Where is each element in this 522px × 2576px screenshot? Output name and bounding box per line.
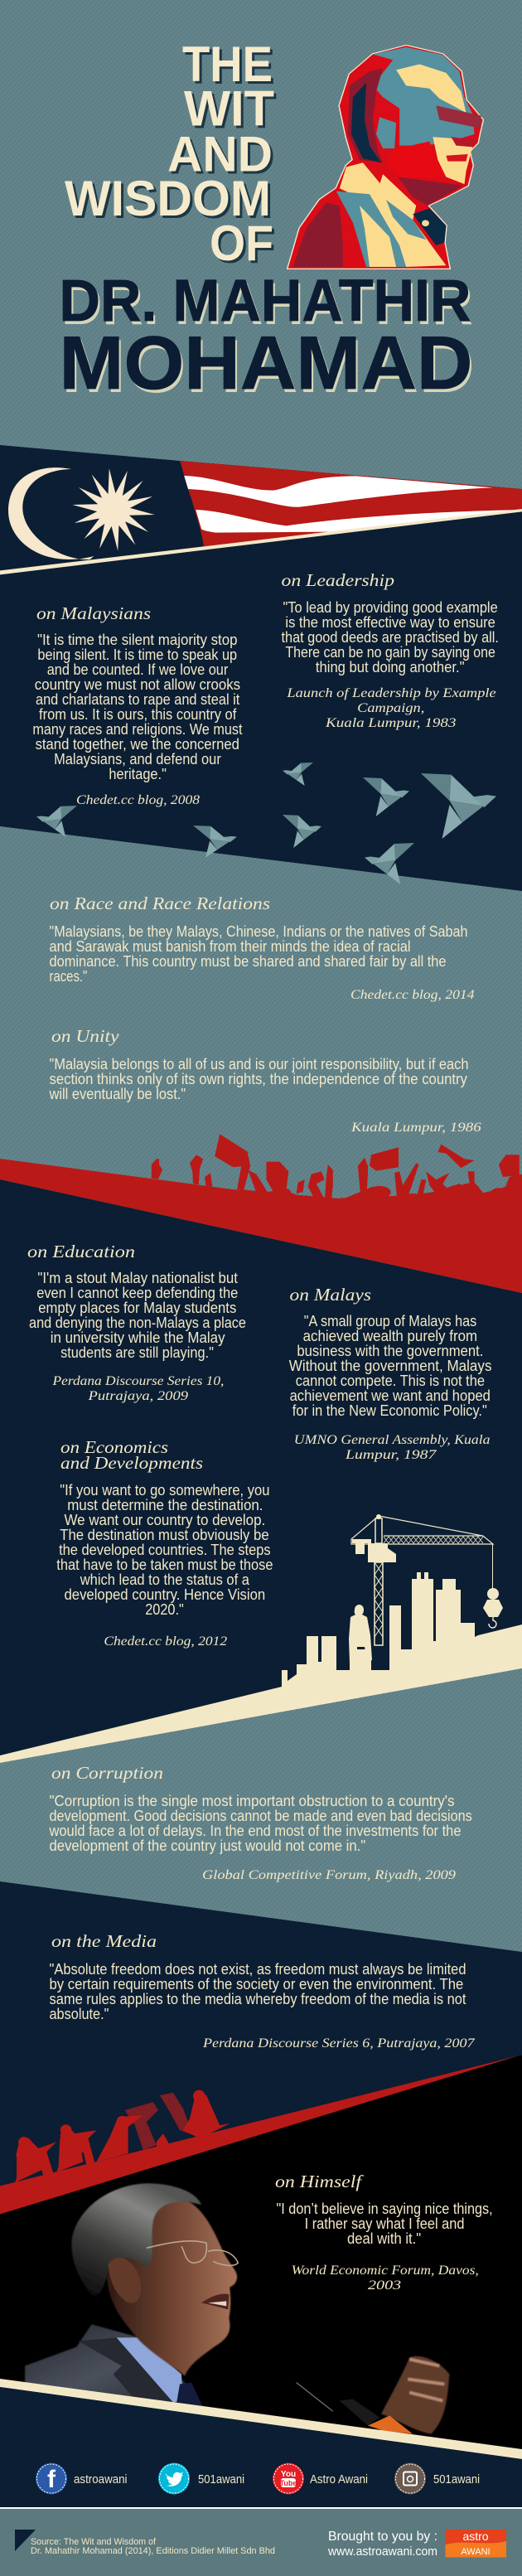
quote: on Economics and Developments: and Developments <box>60 1453 203 1473</box>
hair <box>71 2183 201 2296</box>
instagram: 501awani <box>433 2473 480 2486</box>
quote: on Malaysians: from us. It is ours, this country of <box>39 706 237 723</box>
navy band: the Media <box>0 1881 522 2509</box>
youtube: Astro Awani <box>310 2473 368 2486</box>
quote: on Malays: on Malays <box>290 1285 371 1305</box>
quote: on Leadership: Launch of Leadership by Example <box>286 686 496 700</box>
quote: on Race and Race Relations: Chedet.cc blog, 2014 <box>350 988 474 1002</box>
quote: on Malaysians: many races and religions. We must <box>32 721 243 738</box>
youtube <box>273 2463 368 2495</box>
quote: on Education: and denying the non-Malays a place <box>29 1315 246 1331</box>
facebook: f <box>47 2466 56 2493</box>
quote: on Malays: UMNO General Assembly, Kuala <box>294 1433 491 1447</box>
bird 4 <box>283 815 321 848</box>
Malaysian flag <box>0 461 522 574</box>
quote: on Education: empty places for Malay students <box>38 1300 236 1316</box>
quote: on Economics and Developments: 2020." <box>145 1601 184 1618</box>
quote: on Malaysians: on Malaysians <box>36 603 151 623</box>
quote: on Education: "I'm a stout Malay nationalist but <box>37 1270 238 1286</box>
quote: on Leadership: "To lead by providing good example <box>283 599 498 616</box>
navy band: Malaysians and Leadership <box>0 445 522 891</box>
quote: on Malaysians: country we must not allow crooks <box>35 676 240 693</box>
quote: on Himself: "I don’t believe in saying nice things, <box>277 2201 493 2217</box>
title block <box>60 36 475 409</box>
black panel: on Himself <box>0 2055 522 2452</box>
quote: on Leadership <box>282 570 499 730</box>
quote: on Himself: on Himself <box>275 2172 365 2191</box>
quote: on Malays <box>289 1285 492 1462</box>
twitter <box>158 2463 244 2495</box>
title: Dr. Mahathir Mohamad <box>60 269 475 409</box>
title: The Wit and Wisdom of: OF <box>212 218 276 274</box>
hand <box>381 2356 449 2434</box>
flag stripes <box>0 461 522 574</box>
quote: on Malays: "A small group of Malays has <box>304 1313 476 1329</box>
social media row <box>36 2463 480 2495</box>
quote: on Education: in university while the Malay <box>51 1329 225 1346</box>
quote: on Economics and Developments: We want our country to develop. <box>65 1512 265 1528</box>
quote: on Race and Race Relations: on Race and Race Relations <box>50 893 270 913</box>
quote: on Economics and Developments: the developed countries. The steps <box>59 1542 271 1558</box>
quote: on Education: students are still playing." <box>60 1344 214 1361</box>
glasses <box>147 2241 238 2265</box>
quote: on the Media: absolute." <box>50 2006 109 2022</box>
quote: on Malaysians: Chedet.cc blog, 2008 <box>76 793 200 807</box>
navy band: Education, Malays, Economics <box>0 1179 522 1763</box>
quote: on Malays: achieved wealth purely from <box>303 1328 477 1344</box>
brought to you by: www.astroawani.com <box>327 2545 437 2559</box>
quote: on Malaysians: being silent. It is time to speak up <box>37 646 237 663</box>
quote: on Economics and Developments: must determine the destination. <box>67 1497 263 1513</box>
brought to you by <box>327 2530 437 2559</box>
quote: on Unity: section thinks only of its own rights, the independence of the country <box>50 1071 467 1087</box>
worker silhouette <box>349 1605 372 1663</box>
quote: on the Media: by certain requirements of the society or even the environment. The <box>50 1976 463 1993</box>
mouth <box>201 2294 229 2309</box>
quote: on Malaysians: heritage." <box>109 766 167 782</box>
bird 2 <box>421 773 496 839</box>
quote: on Himself: I rather say what I feel and <box>305 2215 464 2232</box>
quote: on Economics and Developments <box>56 1437 273 1649</box>
title: The Wit and Wisdom of: WIT <box>186 83 277 139</box>
cream divider line <box>0 2379 522 2459</box>
ear <box>109 2258 141 2303</box>
quote: on Race and Race Relations: "Malaysians, be they Malays, Chinese, Indians or the natives of Sabah <box>50 923 467 940</box>
quote: on the Media: Perdana Discourse Series 6, Putrajaya, 2007 <box>202 2036 476 2051</box>
brought to you by: Brought to you by : <box>328 2530 437 2544</box>
navy mask under photo <box>0 2387 522 2509</box>
photographers <box>15 2090 230 2183</box>
youtube: You <box>281 2470 296 2479</box>
title: The Wit and Wisdom of: AND <box>170 129 275 184</box>
quote: on Malaysians: and charlatans to rape and steal it <box>36 691 239 708</box>
quote: on Corruption <box>49 1763 472 1882</box>
quote: on Economics and Developments: Chedet.cc blog, 2012 <box>104 1634 227 1649</box>
astro awani logo: AWANI <box>461 2547 491 2557</box>
title: The Wit and Wisdom of: WISDOM <box>65 171 271 226</box>
quote: on Malays: business with the government. <box>297 1343 483 1359</box>
bird 7 <box>365 843 414 884</box>
quote: on Leadership: There can be no gain by saying one <box>285 644 495 661</box>
quote: on Himself: 2003 <box>368 2278 401 2293</box>
crane <box>351 1514 503 1645</box>
cream wedge and city silhouette <box>0 1572 522 1763</box>
instagram <box>394 2463 480 2495</box>
quote: on Economics and Developments: developed country. Hence Vision <box>65 1586 265 1603</box>
quote: on Corruption: "Corruption is the single most important obstruction to a country's <box>50 1793 454 1809</box>
quote: on Malays: Lumpur, 1987 <box>345 1448 437 1462</box>
quote: on Education: on Education <box>27 1242 135 1261</box>
quote: on Leadership: on Leadership <box>282 570 394 590</box>
title: The Wit and Wisdom of: THE <box>182 36 273 92</box>
crowd with flags <box>152 1134 522 1218</box>
quote: on Leadership: Kuala Lumpur, 1983 <box>325 716 456 730</box>
quote: on Unity <box>49 1026 481 1135</box>
quote: on Leadership: Campaign, <box>357 701 424 715</box>
quote: on Malaysians: "It is time the silent majority stop <box>37 632 237 648</box>
quote: on Corruption: would face a lot of delays. In the end most of the investments for the <box>49 1823 462 1839</box>
quote: on Corruption: Global Competitive Forum, Riyadh, 2009 <box>202 1868 456 1882</box>
footer <box>0 2507 522 2576</box>
quote: on Himself <box>275 2172 493 2293</box>
astro awani logo: astro <box>462 2530 489 2543</box>
quote: on Malaysians: stand together, we the concerned <box>36 736 239 753</box>
quote: on the Media: on the Media <box>51 1931 157 1951</box>
quote: on Race and Race Relations: races." <box>50 968 87 985</box>
quote: on Education: Perdana Discourse Series 10, <box>51 1374 224 1388</box>
quote: on Education: Putrajaya, 2009 <box>87 1389 188 1403</box>
quote: on Economics and Developments: which lead to the status of a <box>80 1571 250 1588</box>
quote: on Malaysians: Malaysians, and defend our <box>54 751 221 767</box>
source note: Dr. Mahathir Mohamad (2014), Editions Didier Millet Sdn Bhd <box>31 2546 275 2556</box>
quote: on Malays: Without the government, Malays <box>289 1358 492 1374</box>
red band with press photographers <box>0 2055 520 2214</box>
quote: on Education <box>27 1242 246 1403</box>
quote: on Malays: achievement we want and hoped <box>290 1387 491 1404</box>
title: Dr. Mahathir Mohamad: DR. MAHATHIR <box>60 269 471 334</box>
quote: on Malays: cannot compete. This is not the <box>296 1373 485 1389</box>
origami birds <box>36 763 496 884</box>
quote: on Leadership: thing but doing another." <box>316 659 464 675</box>
title: The Wit and Wisdom of <box>65 36 277 274</box>
title: The Wit and Wisdom of: WIT <box>184 81 274 136</box>
title: Dr. Mahathir Mohamad: MOHAMAD <box>60 322 472 405</box>
quote: on Race and Race Relations: dominance. This country must be shared and shared fair by all the <box>50 953 446 970</box>
quote: on Race and Race Relations: and Sarawak must banish from their minds the idea of racial <box>50 938 411 955</box>
shirt and tie <box>117 2337 183 2403</box>
title: Dr. Mahathir Mohamad: DR. MAHATHIR <box>61 272 473 337</box>
quote: on Economics and Developments: on Economics <box>60 1437 168 1457</box>
red band <box>0 2055 520 2214</box>
quote: on Himself: deal with it." <box>347 2230 421 2247</box>
quote: on the Media: "Absolute freedom does not exist, as freedom must always be limited <box>50 1961 466 1978</box>
suit lapel <box>78 2337 173 2403</box>
quote: on Economics and Developments: The destination must obviously be <box>60 1527 269 1543</box>
bird 5 <box>36 806 77 837</box>
quote: on Unity: Kuala Lumpur, 1986 <box>350 1121 481 1135</box>
quote: on Malays: for in the New Economic Policy." <box>292 1402 487 1419</box>
quote: on Malaysians: and be counted. If we love our <box>47 661 228 678</box>
photo of Dr. Mahathir speaking <box>25 2183 449 2434</box>
red band with crowd silhouette <box>0 1134 522 1293</box>
quote: on Education: even I cannot keep defending the <box>36 1285 238 1301</box>
bird 3 <box>363 777 409 816</box>
bird 6 <box>193 826 237 858</box>
quote: on Corruption: on Corruption <box>51 1763 163 1783</box>
quote: on Unity: on Unity <box>51 1026 119 1046</box>
title: The Wit and Wisdom of: WISDOM <box>67 173 273 229</box>
quote: on Unity: "Malaysia belongs to all of us and is our joint responsibility, but if each <box>50 1056 469 1073</box>
astro awani logo <box>446 2530 506 2558</box>
quote: on Economics and Developments: that have to be taken must be those <box>56 1557 273 1573</box>
quote: on Corruption: development of the country just would not come in." <box>50 1838 365 1854</box>
twitter: 501awani <box>198 2473 244 2486</box>
quote: on Corruption: development. Good decisions cannot be made and even bad decisions <box>50 1808 472 1824</box>
youtube: Tube <box>280 2479 297 2487</box>
facebook <box>36 2463 128 2495</box>
quote: on Economics and Developments: "If you want to go somewhere, you <box>60 1482 269 1499</box>
microphone <box>297 2382 413 2434</box>
flag star <box>69 464 158 555</box>
quote: on the Media <box>50 1931 476 2051</box>
title: Dr. Mahathir Mohamad: MOHAMAD <box>61 325 475 409</box>
poster portrait of Dr. Mahathir <box>288 46 483 269</box>
quote: on the Media: same rules applies to the media whereby freedom of the media is not <box>50 1991 466 2007</box>
quote: on Leadership: is the most effective way to ensure <box>285 614 495 631</box>
suit <box>25 2324 203 2409</box>
title: The Wit and Wisdom of: THE <box>185 39 275 94</box>
quote: on Himself: World Economic Forum, Davos, <box>292 2264 479 2278</box>
quote: on Malaysians <box>32 603 243 807</box>
bird 1 <box>283 763 313 786</box>
quote: on Race and Race Relations <box>50 893 474 1002</box>
source note <box>15 2530 275 2556</box>
source note: Source: The Wit and Wisdom of <box>31 2537 157 2547</box>
title: The Wit and Wisdom of: OF <box>210 215 273 271</box>
title: The Wit and Wisdom of: AND <box>167 126 273 182</box>
flag crescent <box>8 467 94 559</box>
quote: on Unity: will eventually be lost." <box>49 1086 186 1102</box>
red band <box>0 1159 522 1293</box>
quote: on Leadership: that good deeds are practised by all. <box>282 629 499 646</box>
head <box>107 2198 237 2375</box>
facebook: astroawani <box>74 2473 128 2486</box>
construction skyline with crane <box>0 1514 522 1763</box>
